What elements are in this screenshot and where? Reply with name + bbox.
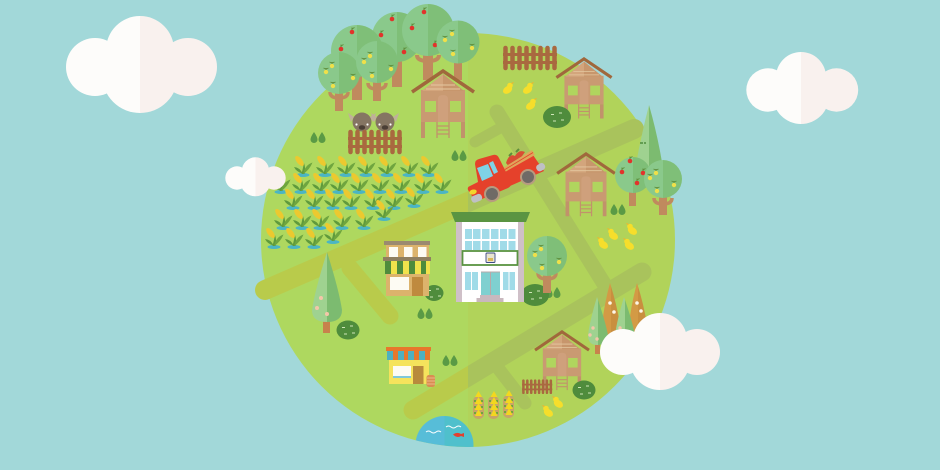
tall tree: back right (634, 105, 664, 175)
green tree one (588, 297, 608, 354)
truck bed with harvest (503, 149, 544, 186)
road network (265, 112, 642, 410)
tree: pears centre (356, 41, 398, 101)
tall tree: left (312, 252, 342, 333)
red fish (453, 433, 464, 437)
truck cabin (468, 155, 511, 200)
flower beds (473, 390, 514, 419)
fence: bottom house (522, 381, 552, 393)
fence: buffalo pen (348, 132, 402, 152)
awning top (386, 347, 431, 351)
pond with fish (416, 416, 474, 447)
cloud: small left (225, 157, 286, 196)
fence: top (503, 48, 557, 68)
tree: pears far left (318, 52, 360, 111)
house: top right (556, 59, 612, 119)
flower bed one (473, 391, 484, 419)
cloud: top left (66, 16, 217, 113)
bushes (336, 106, 596, 400)
awning stripes (385, 261, 430, 274)
house: bottom (535, 332, 589, 390)
west spur road (350, 268, 390, 316)
house: middle right (557, 154, 615, 216)
corn field (265, 155, 452, 249)
truck windows (477, 161, 498, 181)
sprouts (310, 132, 626, 366)
tree: red apples back (372, 12, 422, 87)
shop door (413, 366, 424, 384)
lower windows (465, 272, 515, 290)
flower bed three (503, 390, 514, 418)
shop body (386, 245, 429, 296)
cloud: top right (746, 52, 858, 124)
entrance door (481, 272, 500, 295)
north branch road (497, 112, 606, 287)
house: top centre (412, 71, 474, 138)
upper windows (465, 229, 516, 250)
bush: by shop (424, 285, 444, 301)
cloud: bottom right (600, 313, 720, 390)
tree: red apples left (331, 25, 383, 100)
red pickup truck (468, 149, 546, 204)
shop window (390, 277, 409, 290)
green conical trees (588, 297, 635, 354)
water ripples (426, 426, 461, 433)
awning ledge (383, 257, 431, 261)
main road (265, 129, 634, 290)
orange tree two (629, 283, 647, 352)
bush: by office (521, 284, 549, 306)
entrance steps (476, 295, 504, 302)
fruit tree: red apples right (615, 156, 651, 206)
water buffalo pair (348, 112, 399, 132)
orchard: fruit trees (318, 4, 480, 111)
small north spur road (475, 127, 502, 142)
office building (451, 212, 530, 302)
shop window (393, 366, 411, 378)
bush: by tall tree (336, 320, 360, 340)
buffalo left (348, 112, 376, 132)
chicks (501, 82, 639, 419)
tree: red apples large (402, 4, 454, 80)
south road (413, 272, 642, 410)
orange conical trees (602, 283, 647, 352)
green tree two (615, 297, 635, 345)
fruit tree: by office (527, 236, 567, 293)
truck wheels (484, 169, 536, 202)
fruit tree: pears right (644, 160, 682, 215)
buffalo right (371, 112, 399, 132)
shop upper windows (389, 247, 426, 257)
shop door (412, 277, 423, 296)
truck headlight and bumpers (469, 162, 546, 204)
general store with striped awning (383, 241, 431, 296)
globe island (261, 33, 675, 447)
bush: top right (543, 106, 571, 128)
bush: bottom house (572, 380, 596, 400)
south spur road (498, 368, 525, 403)
building body (456, 222, 524, 302)
orange tree one (602, 283, 620, 352)
green roof (451, 212, 530, 222)
shop top ledge (384, 241, 430, 245)
book emblem (486, 253, 495, 262)
tree: pears right (436, 20, 480, 80)
shop body (389, 358, 429, 384)
wooden barrel (426, 375, 435, 387)
sign board (462, 251, 518, 265)
building pillars (456, 222, 524, 302)
flower bed two (488, 391, 499, 419)
corner shop with orange awning (386, 347, 435, 387)
awning stripes (387, 351, 430, 360)
